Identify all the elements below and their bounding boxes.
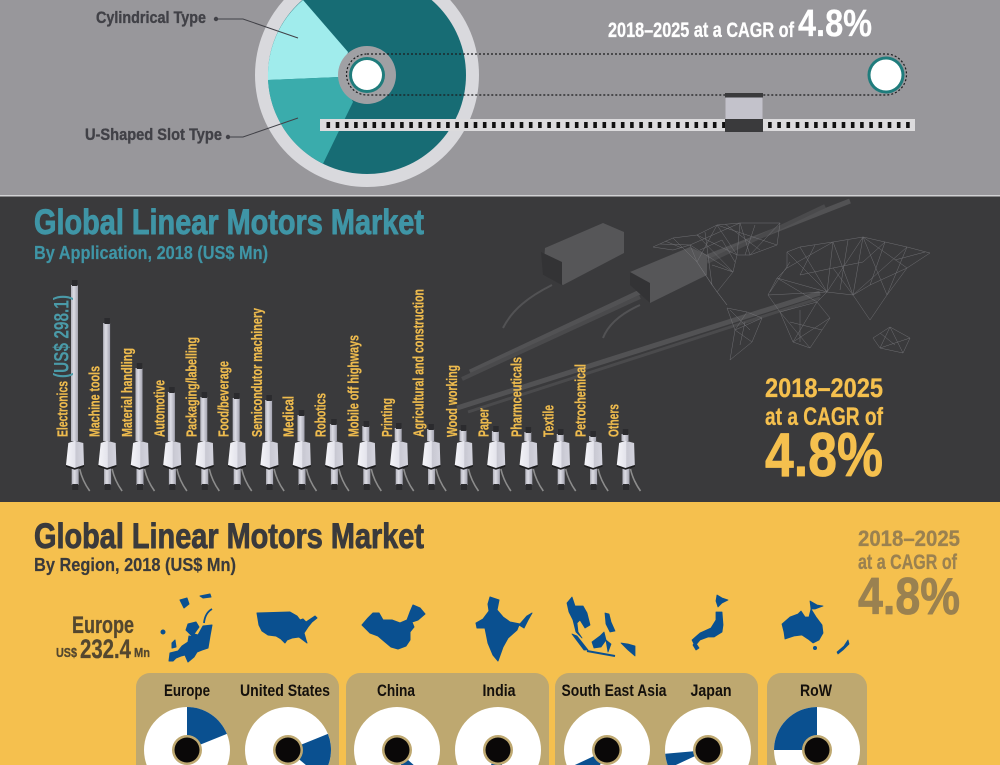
background illustration: linear motors <box>457 201 850 412</box>
cagr: top <box>608 3 872 45</box>
bar: agricultural <box>422 424 446 491</box>
bar: printing <box>390 423 414 491</box>
bar: packaging <box>196 392 219 491</box>
bar labels: Food/beverage <box>216 361 232 437</box>
panel: china and india: India <box>482 682 516 700</box>
bar: petrochemical <box>584 431 608 491</box>
panel: europe and united states <box>136 673 339 765</box>
map: europe <box>161 594 212 662</box>
cagr: top: 4.8% <box>798 3 872 45</box>
cagr: region: at a CAGR of <box>858 551 958 574</box>
bar: machine tools <box>98 318 122 491</box>
panel: top section background <box>0 0 1000 195</box>
bar: food <box>228 393 252 491</box>
panel: rest of world <box>767 673 867 765</box>
bar: pharmaceuticals <box>520 427 543 491</box>
callout: cylindrical type: Cylindrical Type <box>96 8 206 27</box>
panel: south east asia and japan <box>555 673 758 765</box>
cagr: application <box>765 373 884 490</box>
heading: region: By Region, 2018 (US$ Mn) <box>34 555 236 575</box>
bar: electronics <box>66 280 90 491</box>
map: united states <box>257 612 317 643</box>
map: south east asia <box>567 597 635 656</box>
panel: application section background <box>0 195 1000 502</box>
bar labels: Printing <box>379 398 396 437</box>
bar: robotics <box>325 419 349 491</box>
cagr: application: 4.8% <box>765 421 883 490</box>
pie: row <box>774 707 860 765</box>
bar: medical <box>293 410 316 491</box>
bar labels: Medical <box>280 396 298 437</box>
map: australia <box>782 601 849 654</box>
cagr: region: 2018–2025 <box>858 526 960 551</box>
bar labels: Electronics <box>54 381 72 437</box>
bar labels: Material handling <box>119 348 136 437</box>
panel: europe and united states: Europe <box>164 682 210 700</box>
background illustration: wireframe world map <box>653 223 930 360</box>
panel: europe and united states: United States <box>240 682 330 700</box>
bar labels: Mobile off highways <box>346 335 362 437</box>
pie: india <box>455 707 541 765</box>
bar: textile <box>552 429 576 491</box>
bar labels: Others <box>606 404 622 437</box>
pie: japan <box>665 707 751 765</box>
panel: south east asia and japan: South East Asia <box>562 682 667 700</box>
heading: application: Global Linear Motors Market <box>34 203 424 242</box>
value label: electronics: (US$ 298.1) <box>50 295 74 378</box>
bar labels: Petrochemical <box>572 364 590 437</box>
bar: material handling <box>131 363 154 491</box>
heading: region: Global Linear Motors Market <box>34 517 424 556</box>
bar labels: Wood working <box>444 365 461 437</box>
pie: europe <box>144 707 230 765</box>
bar labels: Automotive <box>152 380 168 437</box>
bar labels: Semicondutor machinery <box>249 308 266 437</box>
bar labels: Paper <box>476 408 492 437</box>
panel: south east asia and japan: Japan <box>690 682 732 700</box>
bar: semiconductor <box>260 395 284 491</box>
bar labels: Textile <box>540 405 558 437</box>
bar labels: Machine tools <box>86 366 104 437</box>
pie: united states <box>245 707 331 765</box>
heading: application: By Application, 2018 (US$ Mn) <box>34 243 268 263</box>
callout: europe value: Europe <box>72 612 134 639</box>
linear track <box>320 119 915 131</box>
bar labels: Agricultural and construction <box>410 289 428 437</box>
belt: dotted loop <box>346 54 906 95</box>
cagr: region: 4.8% <box>858 568 960 626</box>
heading: region <box>34 517 424 575</box>
carriage <box>725 93 763 132</box>
panel: region section background <box>0 502 1000 765</box>
panel: rest of world: RoW <box>800 682 832 700</box>
map: china <box>362 605 425 649</box>
bar: mobile off highways <box>358 421 381 491</box>
cagr: application: 2018–2025 <box>765 373 883 403</box>
panel: china and india <box>346 673 549 765</box>
callout: europe value <box>56 612 150 664</box>
cagr: top: 2018–2025 at a CAGR of <box>608 19 795 42</box>
callout: europe value: Mn <box>134 645 150 660</box>
callout: europe value: US$ <box>56 645 78 660</box>
bar: automotive <box>163 387 187 491</box>
bar: paper <box>487 426 511 491</box>
cagr: region <box>858 526 960 626</box>
bar labels: Pharmceuticals <box>508 357 526 437</box>
bar: others <box>617 429 640 491</box>
pulley: left <box>349 57 385 93</box>
bar labels: Packaging/labelling <box>184 337 200 437</box>
bar labels <box>54 289 622 437</box>
pie: south east asia <box>564 707 650 765</box>
callout: europe value: 232.4 <box>80 634 131 664</box>
map: india <box>476 597 532 661</box>
bar: wood working <box>455 425 478 491</box>
callout: cylindrical type <box>96 8 298 38</box>
map: japan <box>692 595 728 650</box>
cagr: application: at a CAGR of <box>765 403 884 431</box>
pulley: right <box>868 56 904 94</box>
chart: product type donut <box>255 0 479 187</box>
bar labels: Robotics <box>312 393 330 437</box>
callout: u-shaped slot type <box>85 118 298 144</box>
heading: application <box>34 203 424 263</box>
panel: china and india: China <box>377 682 416 700</box>
pie: china <box>354 707 440 765</box>
callout: u-shaped slot type: U-Shaped Slot Type <box>85 125 222 144</box>
